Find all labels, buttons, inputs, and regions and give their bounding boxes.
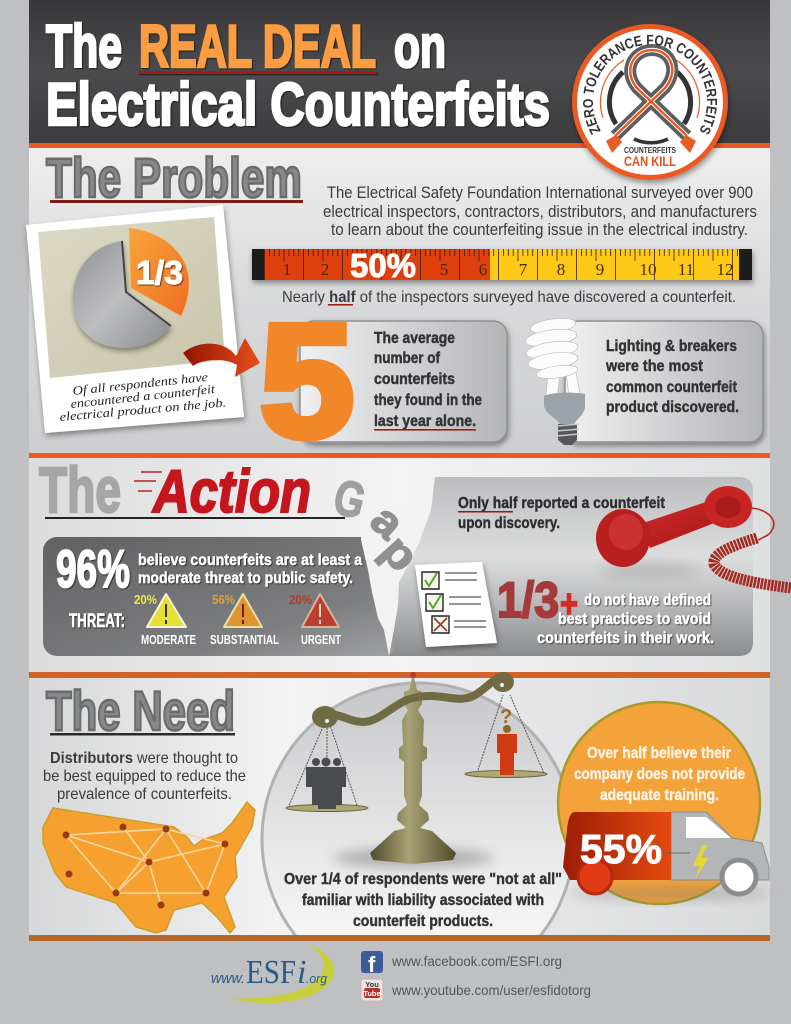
threat: urgent: [289, 592, 341, 647]
threat: substantial: 56%: [212, 592, 235, 607]
text: liability: [284, 871, 562, 930]
threat: moderate: [134, 592, 196, 647]
photo caption: Of all respondents have: [72, 370, 209, 398]
threat: moderate: MODERATE: [141, 632, 196, 647]
panel: liability circle: [260, 682, 570, 935]
threat: moderate: 20%: [134, 592, 157, 607]
icon: van 55 percent: 55%: [580, 826, 662, 872]
number five: 5: [260, 291, 354, 470]
divider: section 1: [29, 453, 770, 458]
logo: ESFI: .org: [306, 971, 328, 986]
text: only half reported: Only half reported a counterfeit: [458, 495, 665, 512]
text: liability: familiar with liability associated with: [302, 892, 544, 909]
stat text: The average: [374, 330, 455, 347]
logo: ESFI: [211, 945, 334, 1003]
text: distributors: Distributors were thought to: [50, 750, 238, 767]
title: Electrical Counterfeits: [46, 71, 550, 138]
heading: The Problem: The Problem: [46, 146, 302, 209]
link: facebook: www.facebook.com/ESFI.org: [391, 953, 562, 969]
threat: urgent: URGENT: [301, 632, 341, 647]
text: distributors: be best equipped to reduce the: [43, 768, 246, 785]
ruler caption: Nearly half of the inspectors surveyed have discovered a counterfeit.: [282, 289, 736, 306]
panel: section 1 background: [29, 148, 770, 453]
ruler: 50%: 2: [321, 260, 329, 279]
stat box: average five: [260, 291, 507, 470]
torn paper gap: [361, 478, 435, 656]
panel: threat: [43, 537, 403, 656]
logo: ESFI: ESF: [246, 954, 296, 991]
stat text: [374, 330, 482, 431]
ruler: 50%: 8: [557, 260, 565, 279]
heading: The Action Gap: a: [361, 495, 414, 549]
heading: The Action Gap: G: [328, 468, 371, 530]
threat: substantial: SUBSTANTIAL: [210, 632, 279, 647]
ruler: 50%: 9: [596, 260, 604, 279]
badge: zero tolerance: [572, 24, 730, 186]
ruler: 50%: 10: [640, 260, 656, 279]
photo caption: electrical product on the job.: [59, 395, 227, 424]
icon: checklist: [415, 562, 497, 647]
stat: 96 percent: THREAT:: [69, 611, 125, 632]
threat: urgent: 20%: [289, 592, 312, 607]
intro paragraph: [323, 184, 757, 239]
photo caption: [59, 370, 227, 424]
text: liability: Over 1/4 of respondents were "not at all": [284, 871, 562, 888]
stat: one third plus: [497, 572, 714, 647]
icon: facebook: f: [368, 952, 376, 977]
stat: one third plus: best practices to avoid: [558, 611, 711, 628]
title: [46, 13, 550, 138]
pie chart: [73, 228, 189, 348]
ruler: 50%: 50%: [350, 247, 416, 284]
figure: red person with question mark: [497, 706, 517, 775]
text: distributors: [43, 750, 246, 803]
icon: facebook: [361, 951, 383, 977]
title: on: [394, 13, 446, 80]
icon: balance scale: [286, 672, 547, 868]
ruler: 50%: 6: [479, 260, 487, 279]
stat: one third plus: 1/3: [497, 572, 559, 628]
threat: substantial: [210, 592, 279, 647]
icon: youtube: [361, 979, 383, 1001]
logo: ESFI: i: [297, 954, 306, 991]
ruler: 50%: 11: [678, 260, 694, 279]
stat: one third plus: counterfeits in their work.: [537, 630, 714, 647]
arrow: pie to five: [183, 338, 260, 377]
panel: training circle: company does not provide: [574, 766, 745, 783]
map: United States network: [43, 802, 255, 933]
stat text: they found in the: [374, 392, 482, 409]
logo: ESFI: www.: [211, 970, 245, 987]
stat box: lighting and breakers: common counterfeit: [606, 379, 737, 396]
text: only half reported: upon discovery.: [458, 515, 560, 532]
heading: The Need: The Need: [46, 679, 235, 742]
stat box: lighting and breakers: were the most: [605, 358, 703, 375]
badge: zero tolerance: CAN KILL: [624, 154, 676, 169]
ruler: 50%: 1: [283, 260, 291, 279]
panel: section 3 background: [29, 678, 770, 935]
title: REAL DEAL: [139, 13, 376, 80]
heading: The Action Gap: p: [372, 526, 428, 581]
stat text: counterfeits: [374, 371, 455, 388]
icon: youtube: Tube: [363, 989, 381, 998]
icon: youtube: You: [365, 980, 379, 989]
panel: training circle: Over half believe their: [587, 745, 731, 762]
ruler: 50%: [252, 247, 752, 284]
link: youtube: www.youtube.com/user/esfidotorg: [391, 982, 591, 998]
stat box: lighting and breakers: Lighting & breakers: [606, 338, 737, 355]
pie chart: 1/3: [136, 254, 183, 291]
stat text: last year alone.: [374, 413, 476, 430]
heading: The Action Gap: Action: [151, 458, 311, 525]
stat text: number of: [374, 350, 441, 367]
panel: reporting: [389, 477, 753, 656]
ruler: 50%: 7: [519, 260, 528, 279]
panel: training circle: [558, 702, 760, 904]
ruler: 50%: 12: [716, 260, 734, 279]
ruler: 50%: 5: [440, 260, 448, 279]
stat: 96 percent: moderate threat to public safety.: [138, 570, 353, 587]
figure: red person with question mark: ?: [500, 706, 512, 728]
panel: training circle: adequate training.: [600, 787, 719, 804]
stat: 96 percent: [56, 540, 362, 632]
stat: 96 percent: believe counterfeits are at least a: [138, 552, 362, 569]
icon: van 55 percent: [563, 812, 770, 898]
icon: light bulb: [524, 316, 585, 445]
intro paragraph: to learn about the counterfeiting issue in the electrical industry.: [331, 221, 748, 239]
divider: section 3: [29, 935, 770, 941]
figures: group of people: [306, 758, 346, 809]
intro paragraph: electrical inspectors, contractors, distributors, and manufacturers: [323, 203, 757, 221]
title: The: [46, 13, 122, 80]
heading: The Action Gap: The: [39, 454, 121, 526]
stat box: lighting and breakers: [565, 321, 763, 442]
badge: zero tolerance: COUNTERFEITS: [624, 146, 677, 155]
header band: [29, 0, 770, 148]
stat: 96 percent: 96%: [56, 540, 130, 599]
text: only half reported: [458, 495, 665, 532]
icon: red telephone: [596, 486, 791, 588]
heading: The Action Gap: [39, 454, 428, 581]
panel: section 2 background: [29, 458, 770, 673]
badge: zero tolerance: ZERO TOLERANCE FOR COUNTERFEITS: [582, 34, 717, 135]
text: liability: counterfeit products.: [353, 913, 493, 930]
divider: section 2: [29, 672, 770, 678]
stat box: lighting and breakers: product discovered.: [606, 399, 739, 416]
polaroid photo with pie chart: [26, 205, 244, 433]
photo caption: encountered a counterfeit: [70, 382, 216, 411]
stat: one third plus: do not have defined: [584, 592, 711, 609]
stat: one third plus: +: [560, 582, 578, 626]
intro paragraph: The Electrical Safety Foundation International surveyed over 900: [327, 184, 753, 202]
text: distributors: prevalence of counterfeits.: [57, 786, 232, 803]
